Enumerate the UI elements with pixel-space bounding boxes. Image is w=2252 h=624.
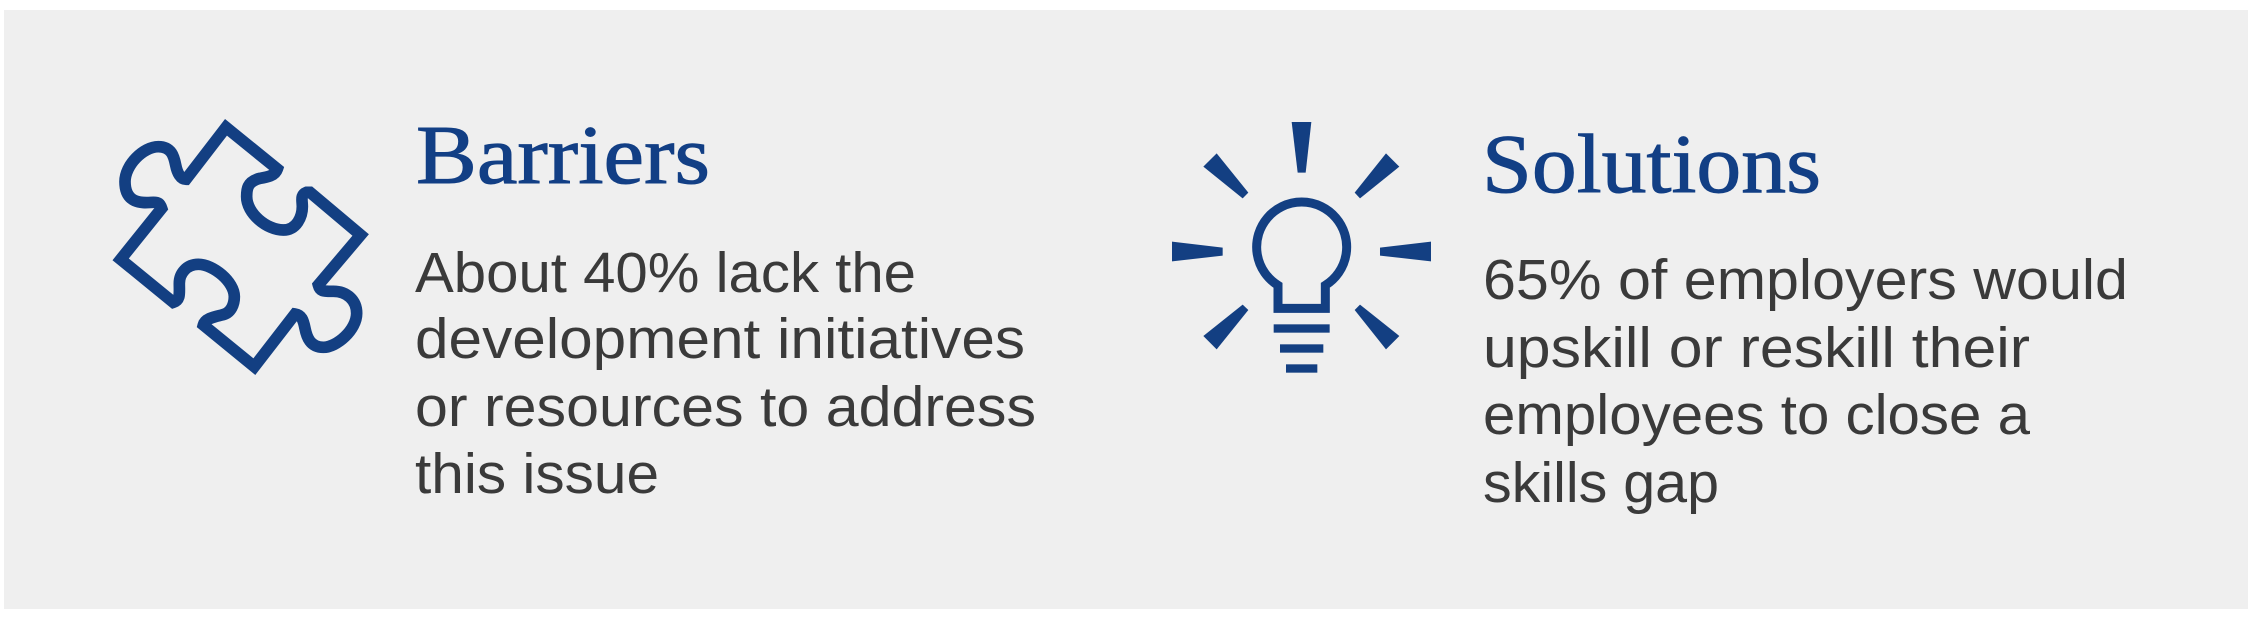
heading: Barriers: Barriers: [416, 109, 710, 202]
text block: solutions description: employees to close a: [1483, 383, 2030, 447]
text block: solutions description: skills gap: [1483, 451, 1719, 515]
panel: barriers: [121, 109, 1036, 506]
icon: light bulb: [1172, 122, 1431, 373]
text block: barriers description: [415, 241, 1036, 506]
text block: barriers description: development initiatives: [415, 307, 1025, 371]
text block: barriers description: or resources to address: [415, 375, 1036, 439]
text block: solutions description: upskill or reskill their: [1483, 316, 2030, 380]
text block: solutions description: [1483, 248, 2128, 515]
icon: puzzle piece: [121, 127, 361, 367]
heading: Solutions: Solutions: [1482, 118, 1821, 211]
text block: barriers description: this issue: [415, 442, 659, 506]
text block: solutions description: 65% of employers would: [1483, 248, 2128, 312]
panel: solutions: [1172, 118, 2128, 515]
text block: barriers description: About 40% lack the: [415, 241, 916, 305]
